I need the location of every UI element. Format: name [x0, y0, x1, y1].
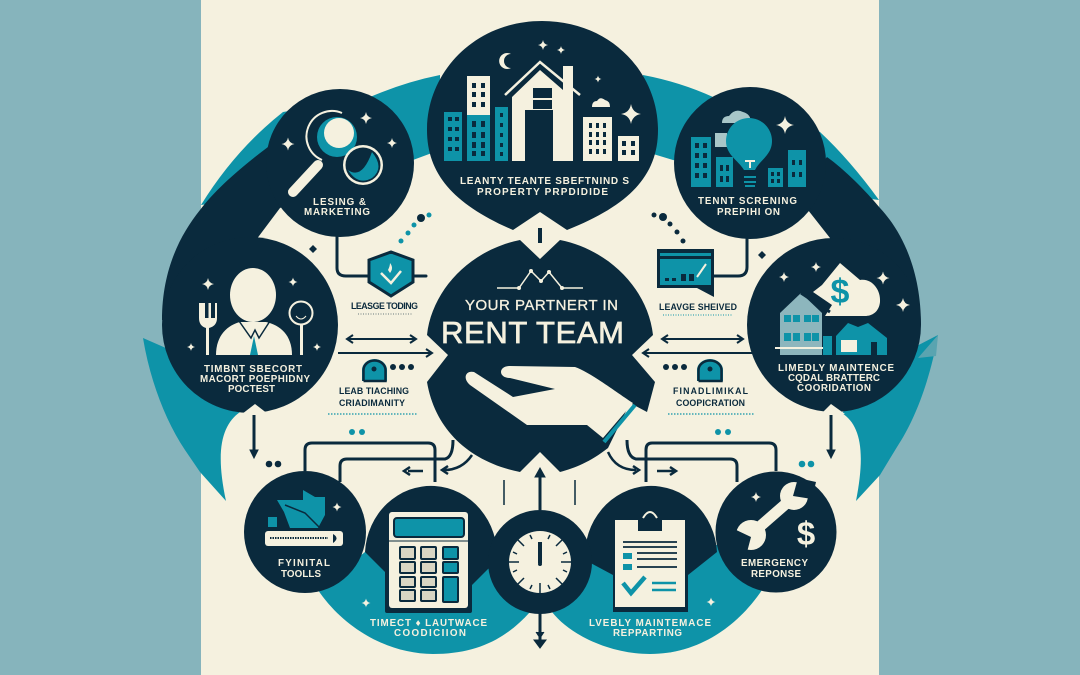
- tenant screening label: [698, 196, 797, 218]
- right lock note: COOPICRATION: [676, 398, 745, 408]
- person label: MACORT POEPHIDNY: [200, 374, 310, 385]
- icon: person with fork and spoon: [187, 268, 321, 355]
- lease label left: LEASGE TODING: [351, 301, 418, 311]
- left lock note: [328, 359, 418, 435]
- panel: tenant screening: [674, 87, 826, 239]
- financial tools label: [278, 558, 330, 580]
- emergency label: EMERGENCY: [741, 558, 808, 569]
- icon: magnifier: [293, 111, 383, 192]
- icon: cloud with dollar: [813, 263, 880, 316]
- property label: PROPERTY PRPDIDIDE: [477, 187, 608, 198]
- title: YOUR PARTNERT IN: [465, 297, 618, 314]
- calculator label: COODICIION: [394, 628, 466, 639]
- icon: screen: [657, 249, 714, 297]
- chart line: [497, 269, 583, 290]
- icon: calculator: [389, 512, 468, 608]
- panel: financial tools: [244, 440, 453, 593]
- icon: cloud with dollar: $: [831, 273, 850, 311]
- panel: lively maintenance reporting: [585, 440, 776, 639]
- connector: leasing to lease shield: [309, 212, 432, 296]
- icon: hand: [466, 366, 635, 442]
- lease label right: LEAVGE SHEIVED: [659, 302, 737, 312]
- maintenance label: CQDAL BRATTERC: [788, 373, 880, 384]
- emergency label: REPONSE: [751, 569, 801, 580]
- left lock note: LEAB TIACHING: [339, 386, 409, 396]
- icon: lightbulb city: [691, 111, 806, 187]
- tenant screening label: TENNT SCRENING: [698, 196, 797, 207]
- icon: houses: [775, 293, 887, 355]
- dots near lower arrows: [266, 461, 814, 467]
- maintenance label: LIMEDLY MAINTENCE: [778, 363, 894, 374]
- reporting label: REPPARTING: [613, 628, 682, 639]
- person label: [200, 364, 310, 395]
- arrows: lower connectors: [250, 228, 835, 648]
- leasing label: [304, 197, 370, 218]
- calculator label: [362, 598, 487, 639]
- panel: clock: [488, 510, 592, 614]
- stars: [282, 112, 397, 150]
- arrows: right row: [643, 335, 753, 357]
- panel: person circle: [162, 147, 338, 414]
- maintenance label: [778, 363, 894, 394]
- title: RENT TEAM: [441, 315, 624, 350]
- property label: [460, 176, 629, 198]
- property label: LEANTY TEANTE SBEFTNIND S: [460, 176, 629, 187]
- title: [441, 297, 624, 350]
- person label: POCTEST: [228, 384, 275, 395]
- leasing label: LESING &: [313, 197, 366, 208]
- icon: city and house: [444, 40, 641, 161]
- calculator label: TIMECT ♦ LAUTWACE: [370, 618, 487, 629]
- reporting label: [589, 598, 716, 639]
- icon: tool bar: [265, 490, 343, 546]
- panel: emergency response: [716, 472, 836, 592]
- arrows: left row: [338, 335, 432, 357]
- reporting label: LVEBLY MAINTEMACE: [589, 618, 711, 629]
- panel: central hub: [427, 240, 655, 472]
- icon: wrench and dollar: $: [797, 515, 815, 552]
- maintenance label: COORIDATION: [797, 383, 871, 394]
- panel: property circle: [427, 21, 658, 230]
- person label: TIMBNT SBECORT: [204, 364, 302, 375]
- connector: screening to lease screen: [652, 212, 766, 297]
- right lock note: FINADLIMIKAL: [673, 386, 749, 396]
- icon: shield: [369, 252, 413, 296]
- financial tools label: FYINITAL: [278, 558, 330, 569]
- panel: maintenance circle: [747, 157, 921, 414]
- panel: leasing and marketing: [266, 89, 414, 237]
- right lock note: [663, 359, 755, 435]
- left lock note: CRIADIMANITY: [339, 398, 405, 408]
- leasing label: MARKETING: [304, 207, 370, 218]
- emergency label: [741, 558, 808, 580]
- icon: clipboard: [615, 512, 685, 607]
- tenant screening label: PREPIHI ON: [717, 207, 780, 218]
- panel: calculator: [362, 486, 497, 639]
- stars: [779, 262, 910, 312]
- financial tools label: TOOLLS: [281, 569, 321, 580]
- teal backdrop shapes: [143, 75, 938, 654]
